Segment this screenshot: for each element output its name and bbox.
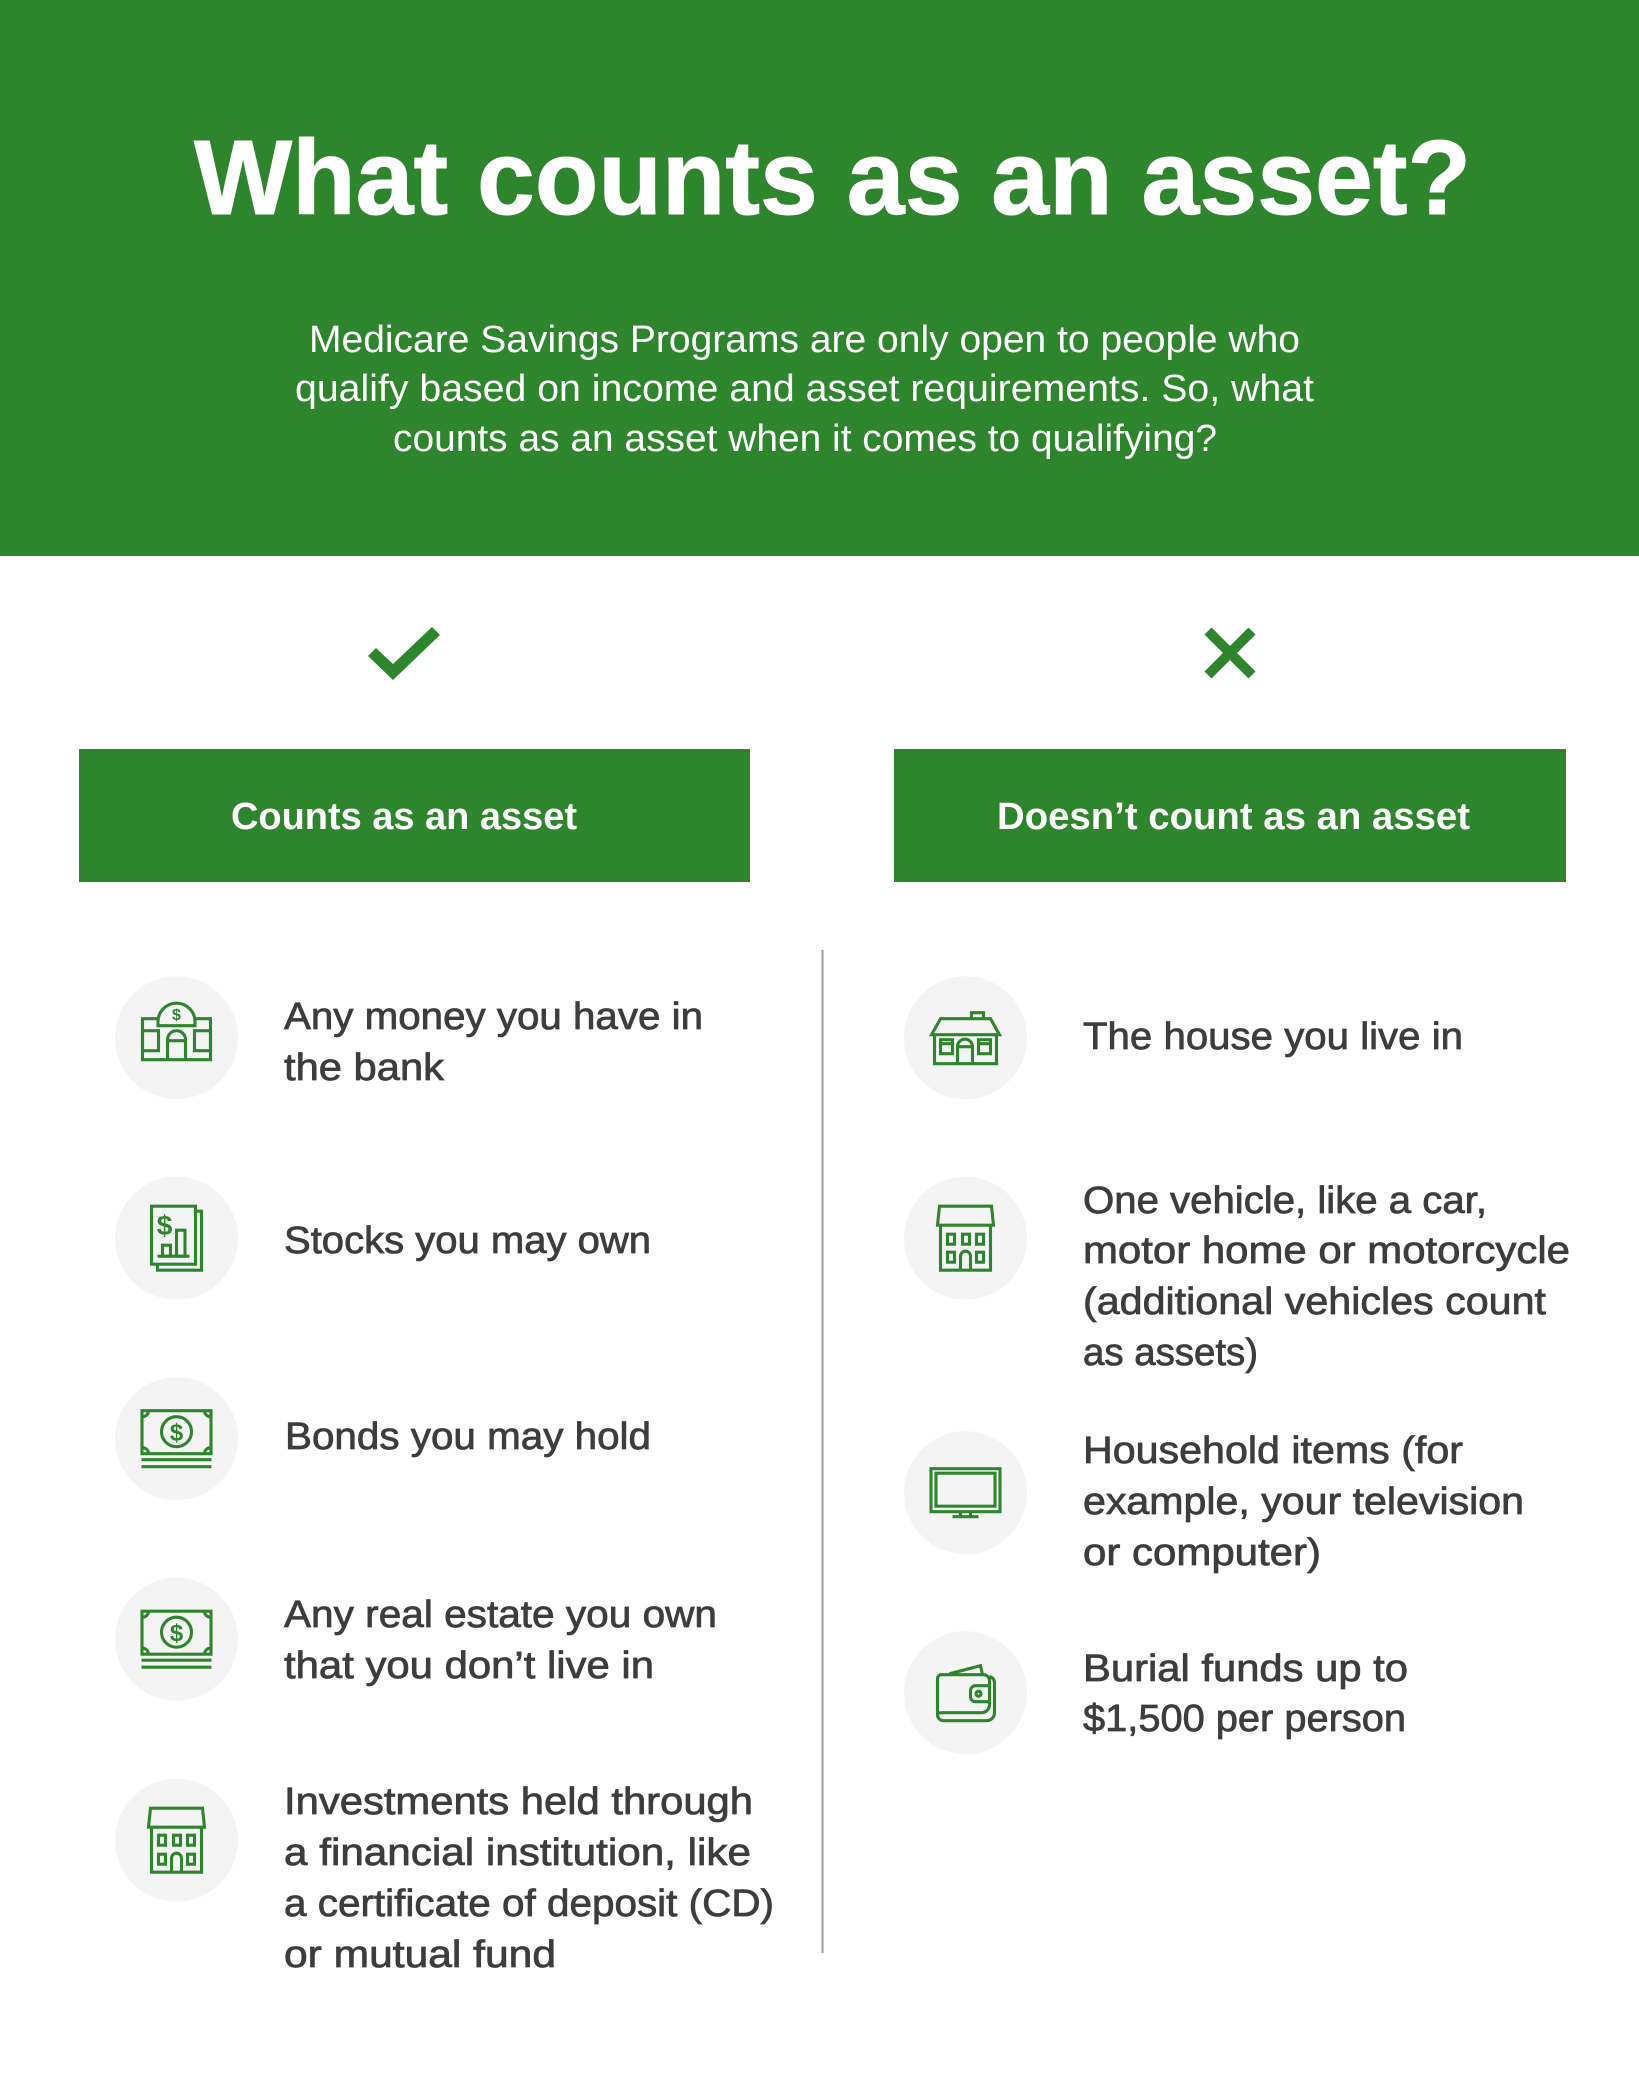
text: vehicle [1083,1180,1570,1374]
icon: television [904,1431,1027,1554]
icon: stock document [115,1177,238,1300]
column header: doesn't count as an asset: Doesn’t count as an asset [997,796,1470,838]
text: real estate: that you don’t live in [284,1645,654,1687]
text: vehicle: (additional vehicles count [1083,1281,1546,1323]
icon: institution building [115,1779,238,1902]
text: investments [284,1781,774,1976]
text: house: The house you live in [1083,1016,1463,1058]
text: money in the bank: the bank [284,1047,445,1089]
text: investments: or mutual fund [284,1934,556,1976]
icon: bank [115,976,238,1099]
icon: building [904,1177,1027,1300]
icon: cash stack: $ [170,1620,184,1647]
intro text [295,319,1314,460]
text: household items: or computer) [1083,1532,1321,1574]
text: money in the bank [284,996,703,1089]
text: real estate [284,1594,717,1687]
text: investments: a certificate of deposit (CD) [284,1883,774,1925]
icon: wallet [904,1631,1027,1754]
icon: stock document: $ [157,1210,173,1241]
text: vehicle: One vehicle, like a car, [1083,1180,1487,1222]
column header: counts as an asset [79,749,750,882]
column header: counts as an asset: Counts as an asset [231,796,577,838]
text: household items: example, your television [1083,1481,1524,1523]
intro text: Medicare Savings Programs are only open to people who [309,319,1300,361]
icon: cash stack: $ [170,1420,184,1447]
text: household items: Household items (for [1083,1430,1463,1472]
icon: cash stack [115,1377,238,1500]
icon: house [904,976,1027,1099]
icon: check mark [368,627,440,680]
intro text: counts as an asset when it comes to qualifying? [393,418,1217,460]
text: investments: Investments held through [284,1781,753,1823]
title: What counts as an asset? [194,119,1471,237]
text: stocks: Stocks you may own [284,1220,651,1262]
text: burial funds [1083,1648,1408,1740]
text: investments: a financial institution, like [284,1832,751,1874]
text: vehicle: motor home or motorcycle [1083,1230,1570,1272]
column header: doesn't count as an asset [894,749,1566,882]
text: money in the bank: Any money you have in [284,996,703,1038]
header band [0,0,1639,556]
text: burial funds: $1,500 per person [1083,1698,1406,1740]
text: bonds: Bonds you may hold [285,1416,651,1458]
text: household items [1083,1430,1524,1574]
text: burial funds: Burial funds up to [1083,1648,1408,1690]
icon: cross mark [1208,631,1252,675]
text: real estate: Any real estate you own [284,1594,717,1636]
icon: bank: $ [172,1007,181,1024]
icon: cash stack [115,1578,238,1701]
intro text: qualify based on income and asset requirements. So, what [295,368,1314,410]
text: vehicle: as assets) [1083,1332,1258,1374]
